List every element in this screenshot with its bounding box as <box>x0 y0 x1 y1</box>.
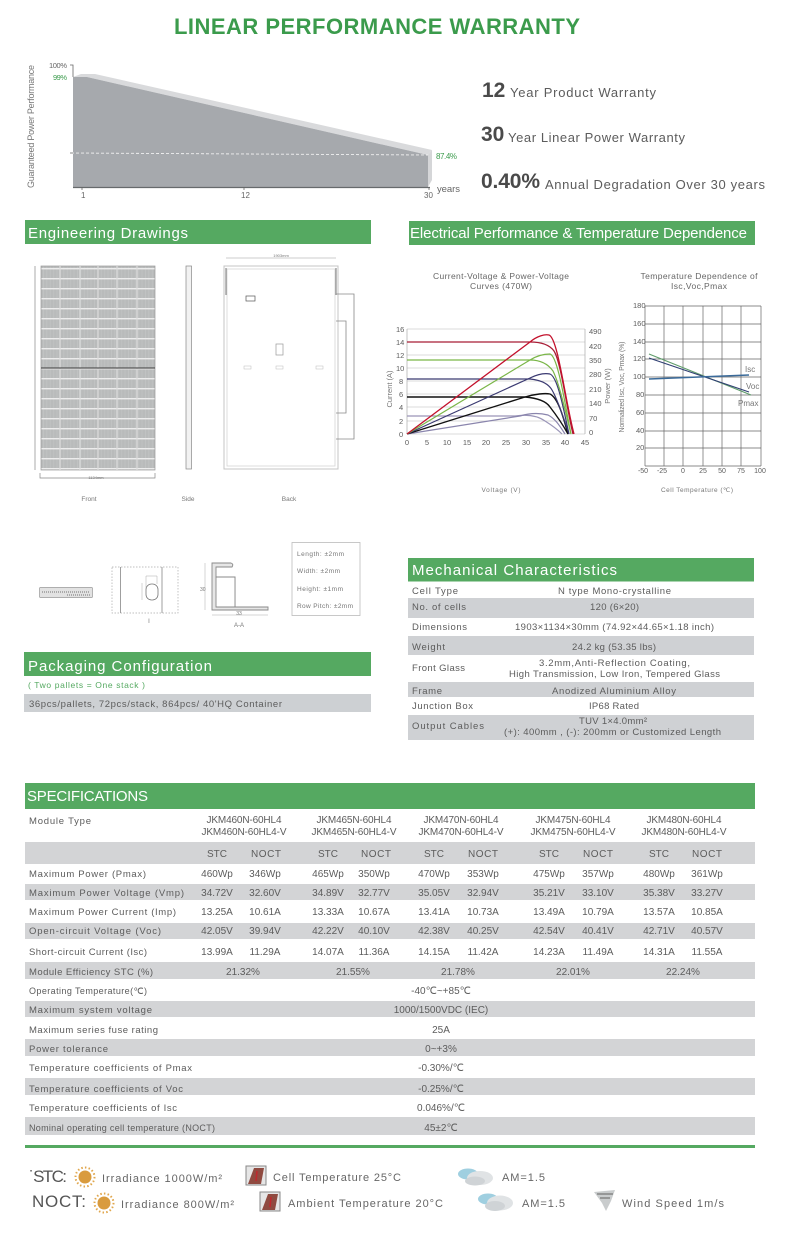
panel: specifications table: 480Wp <box>643 869 675 880</box>
panel: mechanical characteristics: (+): 400mm , (-): 200mm or Customized Length <box>504 727 721 738</box>
engineering drawing: front: Front <box>81 496 97 503</box>
warranty chart: 99% <box>53 73 67 82</box>
chart: temperature dependence <box>619 271 766 494</box>
chart: temperature dependence: 100 <box>633 372 646 381</box>
panel: specifications table: JKM480N-60HL4 <box>646 815 722 826</box>
panel: specifications table: 10.79A <box>582 907 614 918</box>
panel: specifications table: STC <box>539 849 559 860</box>
panel: specifications table: 25A <box>432 1025 450 1036</box>
panel: specifications table: Short-circuit Current (Isc) <box>29 947 147 958</box>
warranty chart: years <box>437 184 460 195</box>
panel: specifications table: 14.23A <box>533 947 565 958</box>
engineering drawing: side <box>181 266 195 503</box>
panel: specifications table: 13.25A <box>201 907 233 918</box>
panel: mechanical characteristics: Dimensions <box>412 622 467 633</box>
warranty chart: 30 <box>424 191 433 200</box>
panel: specifications table: 11.29A <box>250 947 281 958</box>
heading: electrical performance: Electrical Performance & Temperature Dependence <box>410 225 747 242</box>
mounting: pallet strip <box>40 588 92 598</box>
panel: mechanical characteristics: Cell Type <box>412 586 458 597</box>
chart: temperature dependence: -50 <box>638 468 648 475</box>
chart: current-voltage curves: 210 <box>589 385 602 394</box>
chart: current-voltage curves: 0 <box>589 428 593 437</box>
panel: specifications table: JKM460N-60HL4 <box>206 815 282 826</box>
chart: current-voltage curves: 140 <box>589 399 602 408</box>
panel: specifications table: 346Wp <box>249 869 281 880</box>
panel: specifications table: Open-circuit Voltage (Voc) <box>29 926 161 937</box>
panel: mechanical characteristics: Mechanical Characteristics <box>412 562 617 579</box>
panel: mechanical characteristics: Frame <box>412 686 442 697</box>
chart: current-voltage curves: 5 <box>425 438 429 447</box>
panel: mechanical characteristics: 120 (6×20) <box>590 602 639 613</box>
panel: specifications table: 39.94V <box>249 926 281 937</box>
panel: specifications table: Temperature coefficients of Voc <box>29 1084 183 1095</box>
panel: specifications table: 465Wp <box>312 869 344 880</box>
engineering drawing: back: Back <box>282 496 297 503</box>
panel: specifications table: 475Wp <box>533 869 565 880</box>
chart: current-voltage curves: 350 <box>589 356 602 365</box>
specifications heading <box>25 783 755 809</box>
icon: wind <box>594 1190 615 1211</box>
icon: cloud <box>478 1194 513 1211</box>
chart: current-voltage curves: 4 <box>399 403 403 412</box>
engineering drawing: back: 1903mm <box>273 253 289 258</box>
panel: specifications table: 32.60V <box>249 888 281 899</box>
panel: specifications table: JKM475N-60HL4-V <box>530 827 616 838</box>
panel: specifications table: 42.22V <box>312 926 344 937</box>
panel: specifications table: 14.07A <box>312 947 344 958</box>
warranty chart: 12 <box>241 191 250 200</box>
chart: temperature dependence: Isc,Voc,Pmax <box>671 281 728 291</box>
panel: specifications table: 34.72V <box>201 888 233 899</box>
panel: specifications table: NOCT <box>583 849 613 860</box>
chart: temperature dependence: 20 <box>636 443 644 452</box>
chart: current-voltage curves: 45 <box>581 438 589 447</box>
legend: STC row: AM=1.5 <box>502 1172 545 1184</box>
heading: engineering drawings: Engineering Drawings <box>28 225 188 242</box>
panel: specifications table: 361Wp <box>691 869 723 880</box>
chart: current-voltage curves: 14 <box>396 338 404 347</box>
chart: current-voltage curves: 16 <box>396 325 404 334</box>
warranty facts: Annual Degradation Over 30 years <box>545 177 766 192</box>
legend: NOCT row: Wind Speed 1m/s <box>622 1198 724 1210</box>
panel: specifications table: STC <box>318 849 338 860</box>
chart: temperature dependence: -25 <box>657 468 667 475</box>
panel: mechanical characteristics: Anodized Aluminium Alloy <box>552 686 676 697</box>
chart: temperature dependence: 0 <box>681 468 685 475</box>
legend: NOCT row <box>32 1190 724 1212</box>
panel: mechanical characteristics: No. of cells <box>412 602 466 613</box>
legend: STC row: Irradiance 1000W/m² <box>102 1173 222 1185</box>
panel: specifications table: -40℃~+85℃ <box>411 986 471 997</box>
chart: temperature dependence: 100 <box>754 468 766 475</box>
chart: current-voltage curves: 70 <box>589 414 597 423</box>
panel: specifications table: 45±2℃ <box>424 1123 458 1134</box>
chart: current-voltage curves: 10 <box>396 364 404 373</box>
legend: STC row: Cell Temperature 25°C <box>273 1172 401 1184</box>
panel: specifications table: 13.41A <box>418 907 450 918</box>
icon: cell temperature <box>246 1166 266 1185</box>
panel: specifications table: -0.25%/℃ <box>418 1084 464 1095</box>
chart: current-voltage curves: Current-Voltage & Power-Voltage <box>433 271 569 281</box>
chart: current-voltage curves: 2 <box>399 417 403 426</box>
panel: packaging configuration <box>24 652 371 712</box>
chart: current-voltage curves: 35 <box>542 438 550 447</box>
chart: current-voltage curves: 12 <box>396 351 404 360</box>
chart: temperature dependence: Temperature Dependence of <box>640 271 758 281</box>
chart: current-voltage curves: Power (W) <box>603 368 612 404</box>
chart: temperature dependence: 140 <box>633 337 646 346</box>
panel: specifications table: 42.71V <box>643 926 675 937</box>
panel: specifications table: 34.89V <box>312 888 344 899</box>
chart: current-voltage curves: 0 <box>399 430 403 439</box>
chart: current-voltage curves <box>385 271 612 494</box>
panel: specifications table: JKM465N-60HL4 <box>316 815 392 826</box>
chart: current-voltage curves: 280 <box>589 370 602 379</box>
heading: electrical performance <box>409 221 755 245</box>
engineering drawing: side: Side <box>181 496 195 503</box>
panel: mechanical characteristics: Front Glass <box>412 663 465 674</box>
panel: specifications table: 14.15A <box>418 947 450 958</box>
chart: temperature dependence: Isc <box>745 365 755 374</box>
warranty facts: Year Linear Power Warranty <box>508 130 686 145</box>
panel: specifications table: 11.49A <box>583 947 614 958</box>
panel: specifications table <box>25 783 755 1135</box>
icon: ambient temperature <box>260 1192 280 1211</box>
panel: specifications table: 13.57A <box>643 907 675 918</box>
icon: cloud <box>458 1168 493 1186</box>
engineering drawing: back <box>224 253 354 503</box>
title: LINEAR PERFORMANCE WARRANTY <box>174 14 580 39</box>
warranty facts <box>481 79 766 193</box>
panel: specifications table: 21.32% <box>226 967 260 978</box>
panel: specifications table: 40.10V <box>358 926 390 937</box>
panel: specifications table: Maximum series fuse rating <box>29 1025 158 1036</box>
panel: specifications table: 10.61A <box>249 907 281 918</box>
panel: mechanical characteristics: Junction Box <box>412 701 473 712</box>
panel: specifications table: 470Wp <box>418 869 450 880</box>
mounting: frame section A-A: 33 <box>236 611 242 617</box>
warranty chart <box>26 61 460 200</box>
panel: specifications table: 22.24% <box>666 967 700 978</box>
engineering drawing: front: 1134mm <box>88 475 104 480</box>
panel: packaging configuration: ( Two pallets = One stack ) <box>28 680 145 690</box>
panel: specifications table: Maximum Power Current (Imp) <box>29 907 176 918</box>
chart: current-voltage curves: 15 <box>463 438 471 447</box>
panel: specifications table: 14.31A <box>643 947 675 958</box>
chart: current-voltage curves: 30 <box>522 438 530 447</box>
warranty facts: Year Product Warranty <box>510 85 656 100</box>
chart: temperature dependence: 75 <box>737 468 745 475</box>
panel: specifications table: 32.77V <box>358 888 390 899</box>
panel: specifications table: 460Wp <box>201 869 233 880</box>
tolerances box <box>292 542 360 616</box>
panel: specifications table: Power tolerance <box>29 1044 108 1055</box>
panel: specifications table: 357Wp <box>582 869 614 880</box>
chart: current-voltage curves: Curves (470W) <box>470 281 532 291</box>
mounting: hole detail <box>112 567 178 625</box>
panel: specifications table: STC <box>649 849 669 860</box>
panel: specifications table: 10.85A <box>691 907 723 918</box>
chart: current-voltage curves: 40 <box>561 438 569 447</box>
chart: temperature dependence: 180 <box>633 301 646 310</box>
mounting: frame section A-A <box>200 563 268 629</box>
panel: specifications table: Temperature coefficients of Isc <box>29 1103 177 1114</box>
mounting: hole detail: I <box>148 619 150 625</box>
panel: specifications table: 22.01% <box>556 967 590 978</box>
heading: engineering drawings <box>25 220 371 244</box>
panel: specifications table: 0~+3% <box>425 1044 457 1055</box>
panel: specifications table: JKM475N-60HL4 <box>536 815 611 826</box>
panel: specifications table: 11.36A <box>359 947 390 958</box>
panel: specifications table: Operating Temperature(℃) <box>29 986 147 996</box>
panel: specifications table: 353Wp <box>467 869 499 880</box>
mounting: frame section A-A: 30 <box>200 587 206 593</box>
panel: mechanical characteristics: TUV 1×4.0mm² <box>579 716 647 727</box>
legend: STC row <box>29 1166 545 1186</box>
panel: specifications table: -0.30%/℃ <box>418 1063 464 1074</box>
mounting: frame section A-A: A-A <box>234 623 244 629</box>
panel: specifications table: 11.42A <box>468 947 499 958</box>
chart: temperature dependence: 160 <box>633 319 646 328</box>
panel: mechanical characteristics: 24.2 kg (53.35 lbs) <box>572 642 656 653</box>
chart: current-voltage curves: 6 <box>399 390 403 399</box>
chart: temperature dependence: 40 <box>636 426 644 435</box>
panel: specifications table: Temperature coefficients of Pmax <box>29 1063 192 1074</box>
panel: specifications table: 35.05V <box>418 888 450 899</box>
panel: mechanical characteristics: Weight <box>412 642 445 653</box>
footer divider <box>25 1145 755 1148</box>
warranty chart: 87.4% <box>436 152 457 161</box>
icon: sun <box>94 1194 114 1212</box>
warranty facts: 30 <box>481 123 504 146</box>
panel: specifications table: 10.73A <box>467 907 499 918</box>
legend: NOCT row: NOCT: <box>32 1192 86 1211</box>
chart: current-voltage curves: 8 <box>399 377 403 386</box>
chart: temperature dependence: Pmax <box>738 399 758 408</box>
panel: specifications table: 35.21V <box>533 888 565 899</box>
chart: current-voltage curves: 25 <box>502 438 510 447</box>
chart: temperature dependence: Voc <box>746 382 759 391</box>
panel: specifications table: JKM465N-60HL4-V <box>312 827 397 838</box>
legend: NOCT row: Ambient Temperature 20°C <box>288 1198 443 1210</box>
panel: specifications table: 42.54V <box>533 926 565 937</box>
chart: temperature dependence: 60 <box>636 408 644 417</box>
panel: specifications table: 42.05V <box>201 926 233 937</box>
panel: specifications table: 10.67A <box>358 907 390 918</box>
panel: specifications table: Maximum system voltage <box>29 1005 152 1016</box>
panel: specifications table: JKM460N-60HL4-V <box>202 827 287 838</box>
warranty facts: 0.40% <box>481 170 540 193</box>
panel: specifications table: Module Efficiency STC (%) <box>29 967 153 978</box>
panel: specifications table: SPECIFICATIONS <box>27 788 148 805</box>
chart: current-voltage curves: 420 <box>589 342 602 351</box>
chart: current-voltage curves: 20 <box>482 438 490 447</box>
warranty chart: 1 <box>81 191 86 200</box>
tolerances box: Row Pitch: ±2mm <box>297 603 353 610</box>
panel: specifications table: 40.57V <box>691 926 723 937</box>
panel: mechanical characteristics: High Transmission, Low Iron, Tempered Glass <box>509 669 720 680</box>
panel: specifications table: Maximum Power (Pmax) <box>29 869 146 880</box>
panel: specifications table: 0.046%/℃ <box>417 1103 465 1114</box>
panel: packaging configuration: 36pcs/pallets, 72pcs/stack, 864pcs/ 40'HQ Container <box>29 699 282 710</box>
icon: sun <box>76 1168 94 1186</box>
panel: specifications table: 33.27V <box>691 888 723 899</box>
chart: temperature dependence: 50 <box>718 468 726 475</box>
panel: specifications table: Maximum Power Voltage (Vmp) <box>29 888 184 899</box>
panel: specifications table: 40.41V <box>582 926 614 937</box>
panel: specifications table: JKM470N-60HL4-V <box>418 827 504 838</box>
panel: specifications table: NOCT <box>251 849 281 860</box>
panel: specifications table: 21.55% <box>336 967 370 978</box>
panel: specifications table: 13.99A <box>201 947 233 958</box>
panel: specifications table: Nominal operating cell temperature (NOCT) <box>29 1123 215 1133</box>
panel: specifications table: 1000/1500VDC (IEC) <box>394 1005 488 1016</box>
chart: current-voltage curves: 490 <box>589 327 602 336</box>
chart: current-voltage curves: 10 <box>443 438 451 447</box>
tolerances box: Width: ±2mm <box>297 568 340 575</box>
panel: mechanical characteristics: 1903×1134×30mm (74.92×44.65×1.18 inch) <box>515 622 714 633</box>
chart: current-voltage curves: Current (A) <box>385 370 394 408</box>
panel: specifications table: Module Type <box>29 816 91 827</box>
panel: specifications table: 40.25V <box>467 926 499 937</box>
warranty chart: 100% <box>49 61 67 70</box>
warranty chart: Guaranteed Power Performance <box>26 65 36 188</box>
panel: specifications table: JKM480N-60HL4-V <box>642 827 727 838</box>
chart: temperature dependence: Normalized Isc, Voc, Pmax (%) <box>619 342 626 432</box>
engineering drawing: front <box>35 266 155 503</box>
panel: specifications table: NOCT <box>361 849 391 860</box>
panel: packaging configuration: Packaging Configuration <box>28 658 212 675</box>
panel: specifications table: 35.38V <box>643 888 675 899</box>
legend: NOCT row: AM=1.5 <box>522 1198 565 1210</box>
chart: temperature dependence: 120 <box>633 354 646 363</box>
panel: specifications table: 11.55A <box>692 947 723 958</box>
panel: mechanical characteristics: IP68 Rated <box>589 701 639 712</box>
panel: specifications table: 13.33A <box>312 907 344 918</box>
panel: mechanical characteristics: 3.2mm,Anti-Reflection Coating, <box>539 658 690 669</box>
panel: specifications table: 42.38V <box>418 926 450 937</box>
panel: specifications table: STC <box>424 849 444 860</box>
chart: temperature dependence: 25 <box>699 468 707 475</box>
panel: specifications table: NOCT <box>468 849 498 860</box>
chart: current-voltage curves: 0 <box>405 438 409 447</box>
legend: NOCT row: Irradiance 800W/m² <box>121 1199 234 1211</box>
legend: STC row: ˙STC: <box>29 1167 67 1186</box>
panel: specifications table: STC <box>207 849 227 860</box>
panel: mechanical characteristics <box>408 558 754 740</box>
chart: current-voltage curves: Voltage (V) <box>482 487 520 494</box>
panel: specifications table: JKM470N-60HL4 <box>424 815 499 826</box>
warranty facts: 12 <box>482 79 505 102</box>
chart: temperature dependence: 80 <box>636 390 644 399</box>
panel: specifications table: 32.94V <box>467 888 499 899</box>
panel: mechanical characteristics: N type Mono-crystalline <box>558 586 671 597</box>
chart: temperature dependence: Cell Temperature (℃) <box>661 487 733 494</box>
panel: mechanical characteristics: Output Cables <box>412 721 484 732</box>
tolerances box: Height: ±1mm <box>297 586 343 593</box>
tolerances box: Length: ±2mm <box>297 551 344 558</box>
panel: specifications table: 13.49A <box>533 907 565 918</box>
panel: specifications table: 33.10V <box>582 888 614 899</box>
panel: specifications table: 21.78% <box>441 967 475 978</box>
panel: specifications table: 350Wp <box>358 869 390 880</box>
panel: specifications table: NOCT <box>692 849 722 860</box>
